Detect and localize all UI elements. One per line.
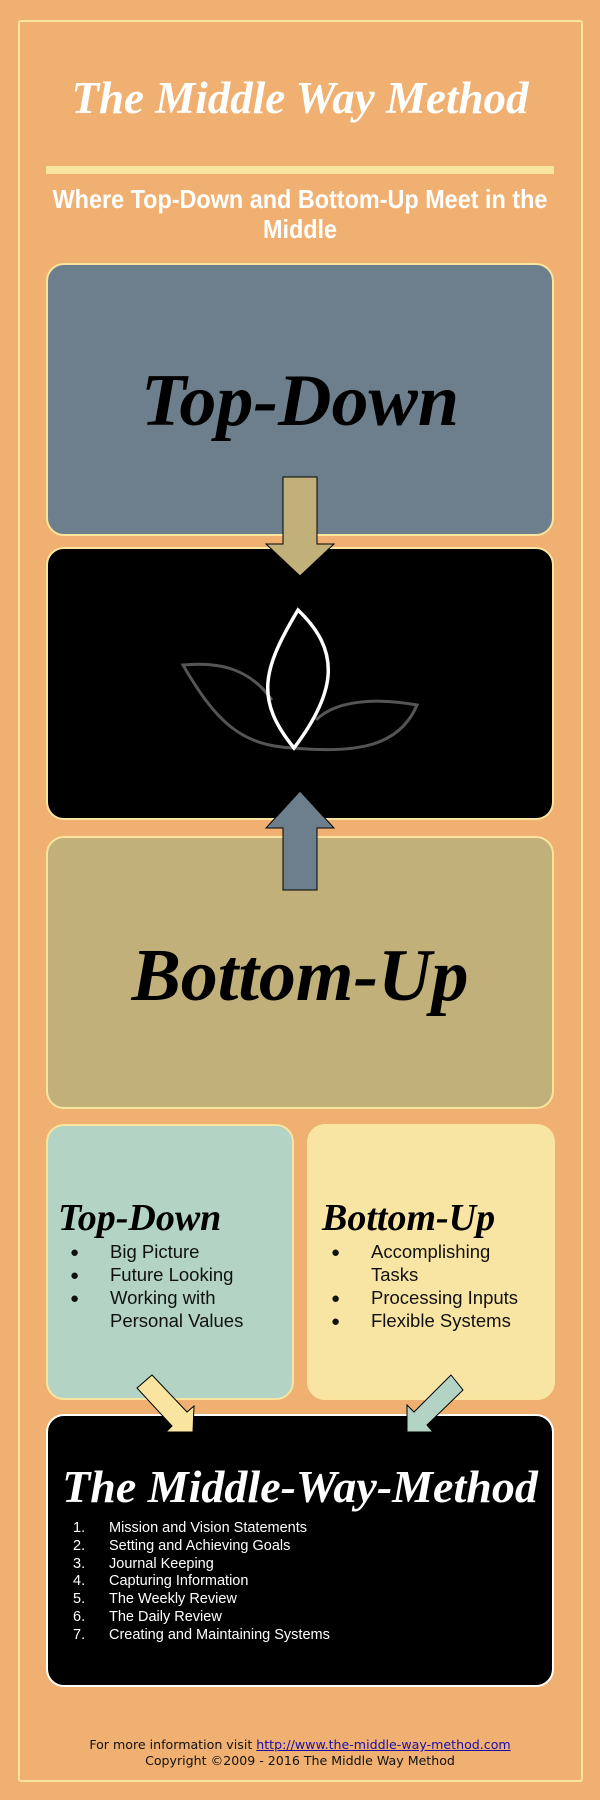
subtitle	[52, 184, 547, 244]
numbered list: Creating and Maintaining Systems	[109, 1627, 330, 1643]
numbered list: 6.	[73, 1609, 85, 1625]
heading: Top-Down	[58, 1197, 221, 1239]
bullet list: Working with Personal Values	[110, 1287, 243, 1331]
arrow: down	[264, 476, 336, 576]
numbered list: 4.	[73, 1573, 85, 1589]
bullet list	[332, 1241, 518, 1331]
arrow: diagonal left	[136, 1374, 195, 1432]
numbered list: The Daily Review	[109, 1609, 222, 1625]
panel: top-down	[46, 263, 554, 536]
panel: top-down summary	[46, 1124, 294, 1400]
bullet list: Big Picture	[110, 1241, 199, 1262]
footer: For more information visit http://www.the-middle-way-method.com	[89, 1737, 511, 1752]
numbered list: Mission and Vision Statements	[109, 1520, 307, 1536]
footer	[89, 1737, 511, 1768]
panel: bottom-up summary	[307, 1124, 555, 1400]
subtitle: Where Top-Down and Bottom-Up Meet in the	[53, 184, 547, 214]
title: The Middle Way Method	[71, 73, 529, 123]
subtitle: Middle	[263, 214, 337, 244]
numbered list: 5.	[73, 1591, 85, 1607]
panel: middle black	[46, 547, 554, 820]
panel: bottom-up	[46, 836, 554, 1109]
heading: Bottom-Up: Bottom-Up	[131, 935, 469, 1017]
numbered list: Journal Keeping	[109, 1556, 214, 1572]
arrow: diagonal right	[406, 1374, 464, 1432]
heading: Top-Down: Top-Down	[141, 360, 459, 442]
bullet list: Accomplishing Tasks	[371, 1241, 490, 1285]
bullet list: Processing Inputs	[371, 1287, 518, 1308]
arrow: up	[264, 792, 336, 890]
panel: the middle-way-method	[46, 1414, 554, 1687]
numbered list: 3.	[73, 1556, 85, 1572]
numbered list	[73, 1520, 330, 1643]
heading: The Middle-Way-Method	[62, 1461, 538, 1512]
numbered list: The Weekly Review	[109, 1591, 237, 1607]
divider	[46, 166, 554, 174]
numbered list: 2.	[73, 1538, 85, 1554]
heading: Bottom-Up	[322, 1197, 495, 1239]
bullet list: Flexible Systems	[371, 1310, 511, 1331]
footer: Copyright ©2009 - 2016 The Middle Way Method	[145, 1753, 455, 1768]
numbered list: Setting and Achieving Goals	[109, 1538, 290, 1554]
numbered list: 7.	[73, 1627, 85, 1643]
numbered list: 1.	[73, 1520, 85, 1536]
bullet list	[71, 1241, 243, 1331]
bullet list: Future Looking	[110, 1264, 233, 1285]
numbered list: Capturing Information	[109, 1573, 248, 1589]
